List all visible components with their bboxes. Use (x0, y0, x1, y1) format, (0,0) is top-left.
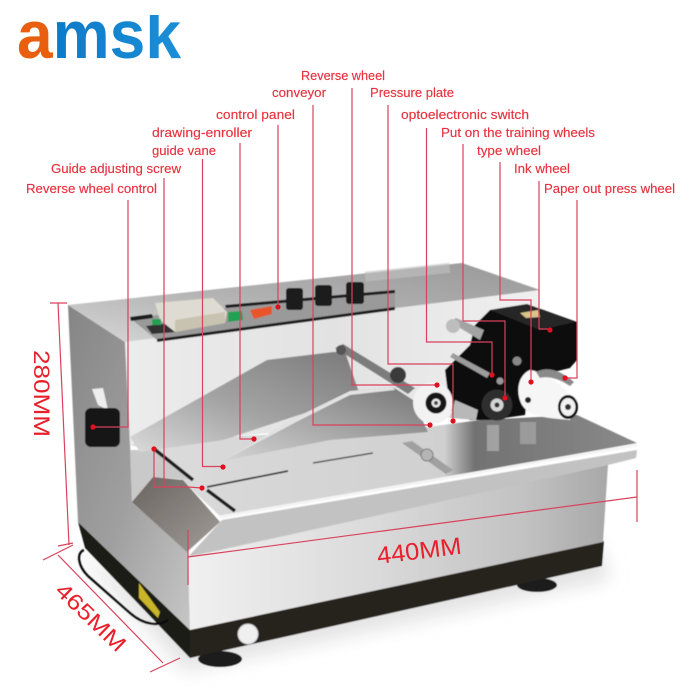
dark reflections (487, 422, 536, 451)
rod (450, 353, 490, 378)
lower guide plate (223, 387, 428, 461)
callout: Ink wheel: Ink wheel (514, 161, 570, 176)
table front lip (188, 450, 637, 557)
callout: conveyor: conveyor (272, 85, 327, 100)
callout: control panel (216, 107, 295, 310)
floor shadow (70, 545, 610, 672)
feet (198, 578, 557, 667)
upper guide plate (130, 352, 360, 452)
hopper notch (132, 477, 220, 552)
callout: conveyor (272, 85, 433, 428)
ink wheel (518, 369, 578, 420)
callout: optoelectronic switch: optoelectronic switch (401, 107, 529, 122)
callout: control panel: control panel (216, 107, 295, 122)
guide arm (335, 344, 415, 394)
power cord (79, 550, 168, 624)
side infill under guide plate (130, 450, 193, 502)
knobs (286, 282, 364, 310)
callout: Paper out press wheel (544, 181, 675, 381)
callout: drawing-enroller: drawing-enroller (152, 125, 253, 140)
front steel panel (188, 464, 608, 630)
warning sticker (139, 583, 160, 618)
dimension: depth 465MM (43, 545, 180, 672)
machine photo illustration (68, 263, 637, 672)
back wall (125, 290, 540, 445)
callout: type wheel (477, 143, 541, 385)
table slots (153, 448, 373, 511)
callout: guide vane (152, 143, 226, 470)
callout: Guide adjusting screw: Guide adjusting screw (51, 161, 182, 176)
side control knob (85, 388, 120, 447)
callout: Pressure plate (370, 85, 456, 424)
callout: Guide adjusting screw (51, 161, 205, 491)
callout: optoelectronic switch (401, 107, 529, 378)
callout: Paper out press wheel: Paper out press wheel (544, 181, 675, 196)
callout: Put on the training wheels: Put on the training wheels (441, 125, 596, 140)
callout: Ink wheel (514, 161, 570, 333)
black base (78, 522, 604, 658)
callout: Reverse wheel: Reverse wheel (301, 68, 385, 83)
type wheel (482, 390, 512, 420)
dimension: width 440MM: 440MM (375, 533, 463, 570)
callout: Pressure plate: Pressure plate (370, 85, 454, 100)
silver bracket (450, 400, 478, 420)
dimension: height 280MM: 280MM (29, 350, 54, 437)
callout: Reverse wheel control: Reverse wheel control (26, 181, 157, 196)
clear cover (155, 298, 227, 332)
table surface (130, 415, 637, 518)
top plate (68, 263, 540, 342)
callout: guide vane: guide vane (152, 143, 216, 158)
silver shaft (450, 318, 484, 340)
callout: type wheel: type wheel (477, 143, 541, 158)
power button (238, 624, 258, 644)
callout: Reverse wheel (301, 68, 440, 388)
control panel (130, 263, 450, 342)
dimension: height 280MM (29, 303, 73, 546)
callout: drawing-enroller (152, 125, 257, 442)
buttons (152, 319, 161, 325)
printing head mechanism (413, 304, 578, 424)
callout: Reverse wheel control (26, 181, 157, 430)
reverse wheel (413, 382, 453, 424)
dimension: depth 465MM: 465MM (51, 578, 131, 657)
left side panel (68, 305, 190, 630)
side guide clamp (402, 441, 453, 474)
callout: Put on the training wheels (441, 125, 596, 401)
dimension: width 440MM (188, 470, 637, 585)
